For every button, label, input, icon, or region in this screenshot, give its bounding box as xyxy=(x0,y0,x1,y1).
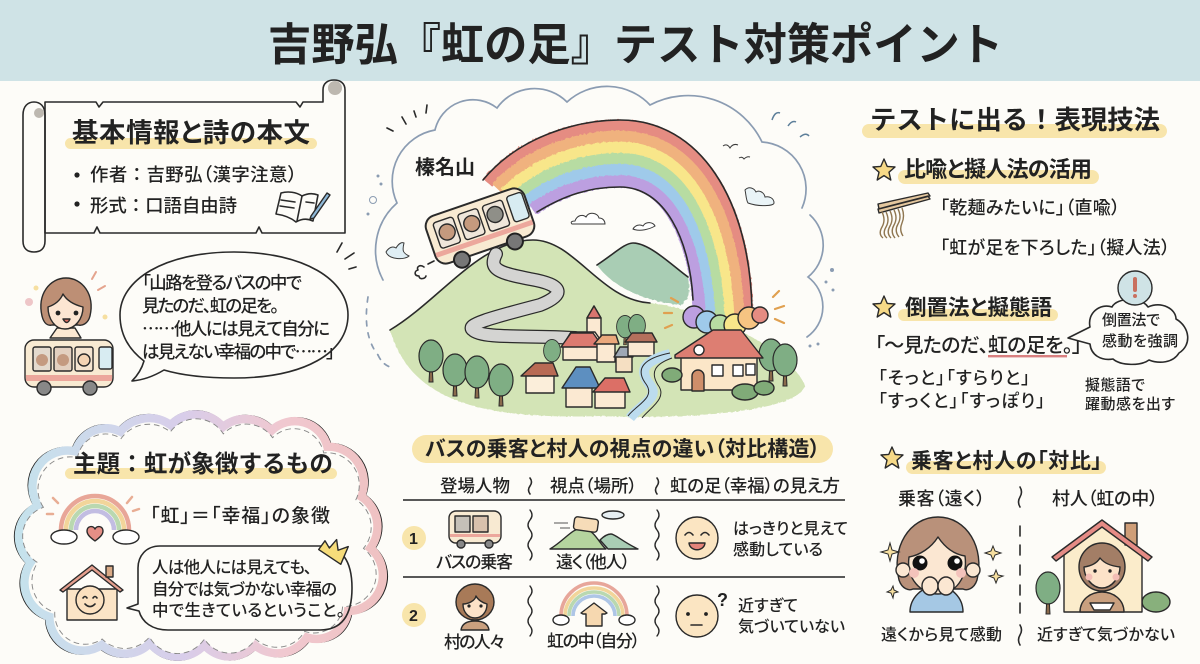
column headers: 登場人物 xyxy=(440,476,510,496)
panel: theme cloud xyxy=(16,413,386,658)
column headers xyxy=(403,476,845,636)
subsection: contrast xyxy=(881,447,1175,645)
icon: far bus on hills xyxy=(550,511,638,549)
equation text: 「虹」＝「幸福」の象徴 xyxy=(150,505,330,527)
label: villagers: 村の人々 xyxy=(444,633,505,652)
subsection: contrast: 乗客と村人の「対比」 xyxy=(911,450,1102,473)
row 1 number xyxy=(402,526,426,550)
text: not noticing: 近すぎて xyxy=(738,597,798,615)
icon: neutral face xyxy=(676,590,728,637)
green ground xyxy=(390,240,805,417)
main house under rainbow foot xyxy=(662,330,774,400)
small bus xyxy=(25,340,113,395)
speech cloud: inversion callout: 感動を強調 xyxy=(1102,332,1178,350)
icon: rainbow with heart xyxy=(47,496,139,544)
panel: scroll with basic information xyxy=(23,80,345,252)
village houses xyxy=(521,306,657,408)
speech bubble: theme explanation: 中で生きているということ。 xyxy=(152,601,345,620)
subsection: metaphor and personification xyxy=(873,157,1170,258)
text: sees clearly xyxy=(733,520,848,559)
text: sees clearly: 感動している xyxy=(733,541,823,559)
bus on slope xyxy=(423,185,540,275)
subsection: metaphor and personification: 「虹が足を下ろした」（擬人法） xyxy=(940,237,1170,258)
heading: techniques: テストに出る！表現技法 xyxy=(870,105,1160,135)
girl xyxy=(25,272,108,338)
speech bubble: poem excerpt: ……他人には見えて自分に xyxy=(142,316,330,341)
speech bubble: theme explanation: 自分では気づかない幸福の xyxy=(152,580,337,599)
decorative marks around cloud xyxy=(366,174,834,348)
icon: happy face xyxy=(676,517,718,559)
subsection: inversion and mimetic words: 「そっと」「すらりと」 xyxy=(878,368,1030,388)
icon: rainbow over house xyxy=(553,583,635,626)
column headers: 虹の足（幸福）の見え方 xyxy=(670,476,840,496)
icon: bus row 1 xyxy=(449,511,501,548)
speech bubble: poem excerpt: 見たのだ、虹の足を。 xyxy=(142,296,279,316)
label: inside rainbow: 虹の中（自分） xyxy=(547,632,640,651)
illustration: girl on bus xyxy=(25,272,113,395)
row 2 number: 2 xyxy=(409,608,418,625)
icon: smiling house xyxy=(60,565,123,620)
subsection: contrast: 近すぎて気づかない xyxy=(1037,626,1175,644)
rainbow xyxy=(483,120,752,322)
icon: crown xyxy=(317,536,349,565)
speech bubble: poem excerpt xyxy=(120,243,356,381)
front mountain outline xyxy=(390,240,650,330)
form line: 形式：口語自由詩 xyxy=(90,195,237,216)
back mountain xyxy=(597,243,689,305)
column headers: 視点（場所） xyxy=(550,476,637,496)
icon: village person xyxy=(456,584,494,630)
subsection: contrast: 村人（虹の中） xyxy=(1052,489,1158,509)
speech bubble: poem excerpt: 「山路を登るバスの中で xyxy=(142,273,302,293)
illustration: moved girl xyxy=(881,517,1003,612)
label: far: 遠く（他人） xyxy=(556,553,630,572)
speech bubble: theme explanation xyxy=(127,546,352,630)
row 1 number: 1 xyxy=(409,531,418,548)
row 2 number xyxy=(402,603,426,627)
speech cloud: inversion callout: 倒置法で xyxy=(1102,312,1160,329)
subsection: inversion and mimetic words: 倒置法と擬態語 xyxy=(905,296,1052,320)
subsection: contrast: 乗客（遠く） xyxy=(898,489,985,509)
winding road xyxy=(472,254,575,338)
subsection: inversion and mimetic words: 躍動感を出す xyxy=(1085,395,1175,413)
author line: 作者：吉野弘（漢字注意） xyxy=(90,164,297,185)
illustration: mountain rainbow scene xyxy=(366,86,834,418)
heading: basic info: 基本情報と詩の本文 xyxy=(72,118,310,148)
text: not noticing xyxy=(738,597,845,636)
speech bubble: poem excerpt: は見えない幸福の中で……」 xyxy=(142,339,335,364)
thought cloud outline xyxy=(366,86,823,367)
text: sees clearly: はっきりと見えて xyxy=(733,520,848,538)
exhaust puff xyxy=(415,261,434,279)
subsection: inversion and mimetic words: 擬態語で xyxy=(1085,376,1145,394)
subsection: inversion and mimetic words: 「すっくと」「すっぽり」 xyxy=(878,391,1045,411)
speech cloud: inversion callout xyxy=(1068,271,1188,364)
subsection: contrast: 遠くから見て感動 xyxy=(881,626,1002,644)
header band with title: 吉野弘『虹の足』テスト対策ポイント xyxy=(268,21,1003,70)
mountain label: 榛名山 xyxy=(415,156,475,179)
label: bus passengers: バスの乗客 xyxy=(435,553,513,572)
subsection: metaphor and personification: 比喩と擬人法の活用 xyxy=(904,157,1092,182)
river xyxy=(630,354,670,418)
table title pill: バスの乗客と村人の視点の違い（対比構造） xyxy=(425,438,820,461)
icon: open book and pen xyxy=(276,192,330,222)
illustration: villager in house xyxy=(1036,520,1170,614)
trees xyxy=(419,314,797,406)
subsection: metaphor and personification: 「乾麺みたいに」（直喩） xyxy=(940,198,1120,218)
text: not noticing: 気づいていない xyxy=(738,618,845,636)
subsection: inversion and mimetic words xyxy=(873,296,1175,413)
header band with title xyxy=(0,0,1200,81)
heading: theme: 主題：虹が象徴するもの xyxy=(73,450,333,478)
panel: expression techniques xyxy=(862,105,1188,645)
rainbow foot blobs xyxy=(664,291,784,336)
speech bubble: theme explanation: 人は他人には見えても、 xyxy=(152,558,312,577)
subsection: inversion and mimetic words: 「〜見たのだ、虹の足を。」 xyxy=(875,334,1082,357)
panel: comparison table xyxy=(402,435,848,652)
icon: noodles and chopsticks xyxy=(878,193,930,238)
sky clouds and birds xyxy=(386,188,774,259)
icon: neutral face: ? xyxy=(717,590,728,610)
